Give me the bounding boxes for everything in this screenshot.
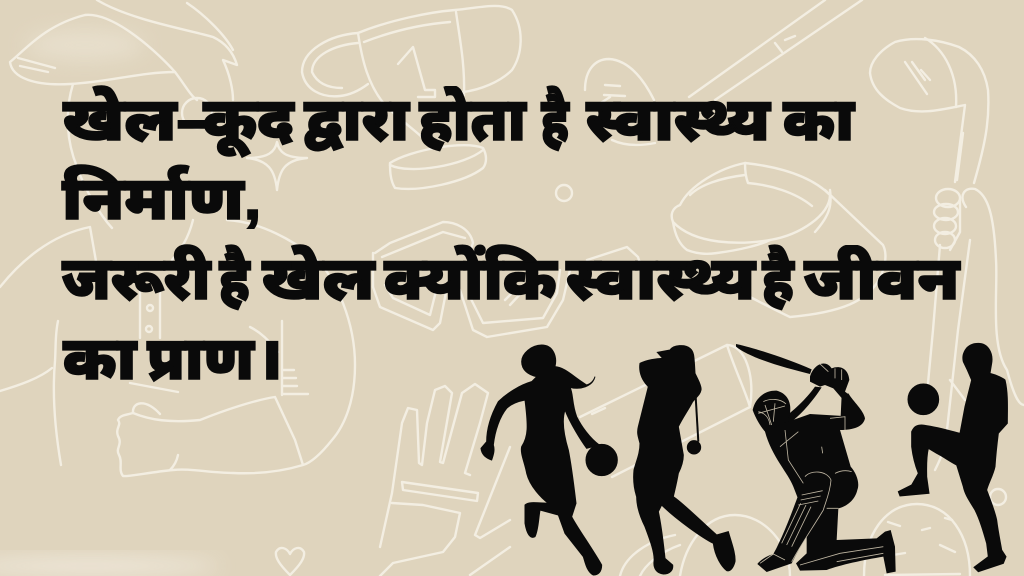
soft glare top left bbox=[25, 29, 145, 61]
title line 3: खेल bbox=[262, 245, 374, 312]
title line 1: स्वास्थ्य bbox=[586, 86, 770, 153]
icon: sparkle bbox=[247, 142, 307, 190]
silhouette: batsman bbox=[736, 344, 896, 573]
line art: hockey stick and ball bbox=[585, 0, 862, 145]
line art: megaphone and balls bbox=[556, 185, 1006, 576]
title line 3: जीवन bbox=[804, 245, 959, 312]
title line 1: खेल bbox=[63, 86, 177, 153]
title line 1: होता bbox=[419, 86, 526, 153]
line art: glove bbox=[380, 384, 510, 576]
title line 4 bbox=[62, 325, 282, 392]
line art: player with cap bbox=[0, 0, 355, 476]
line art: golf club and hand bbox=[870, 38, 1024, 470]
title line 1: कूद bbox=[203, 86, 294, 153]
title line 4: । bbox=[257, 325, 282, 392]
silhouette: golfer bbox=[634, 346, 735, 574]
title line 1: - bbox=[175, 86, 209, 153]
title line 3: है bbox=[762, 245, 794, 312]
line art: whistle ring bbox=[672, 163, 885, 317]
soft glare bottom left bbox=[0, 558, 220, 574]
batsman detail lines bbox=[758, 363, 883, 565]
title line 3 bbox=[61, 244, 962, 312]
title line 2: निर्माण, bbox=[62, 165, 262, 232]
title line 3: जरूरी bbox=[62, 245, 210, 312]
title line 1 bbox=[62, 85, 856, 158]
icon: heart bbox=[276, 548, 304, 575]
title line 1: का bbox=[783, 86, 854, 153]
title line 1: है bbox=[541, 86, 569, 153]
title bbox=[61, 85, 962, 392]
title line 3: है bbox=[219, 245, 250, 312]
line art: trophy bbox=[302, 6, 521, 189]
silhouette: football player bbox=[898, 343, 1007, 572]
line art: glasses bbox=[373, 222, 645, 337]
silhouette: basketball player bbox=[481, 345, 617, 575]
title line 3: क्योंकि bbox=[384, 245, 557, 312]
title line 4: का bbox=[63, 325, 136, 392]
title line 4: प्राण bbox=[147, 325, 254, 392]
title line 3: स्वास्थ्य bbox=[566, 245, 755, 312]
title line 1: द्वारा bbox=[304, 86, 409, 153]
